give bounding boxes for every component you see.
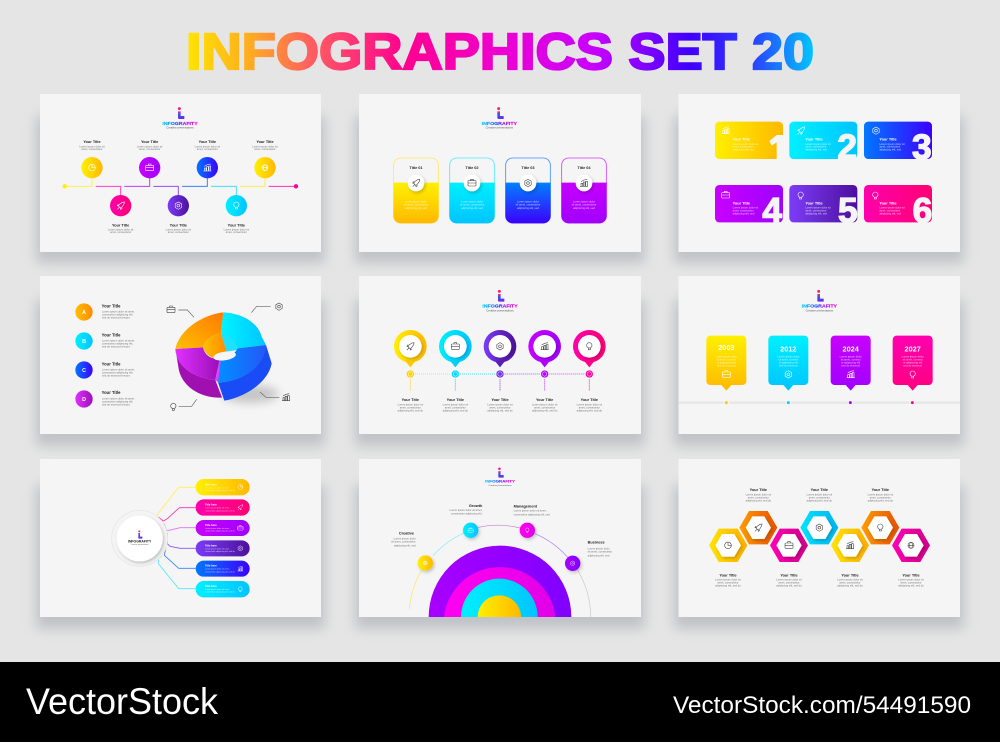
item B: Your Title <box>102 332 121 337</box>
logo: INFOGRAFITY <box>482 304 519 309</box>
pill 2: Title here <box>205 503 217 507</box>
card 5: adipiscing elit, sed <box>805 211 828 215</box>
hexagon 2: Lorem ipsum dolor sit <box>746 493 771 497</box>
pin 5: Your Title <box>581 398 598 402</box>
pill 1: consectetur adipiscing elit, sed do <box>205 489 236 492</box>
pill 5: Lorem ipsum dolor sit amet, <box>205 568 230 571</box>
central hub: INFOGRAFITY <box>128 540 152 544</box>
card 1: amet, consectetur <box>733 145 754 149</box>
card 3: Title 03 <box>521 166 535 170</box>
step 7: Lorem ipsum dolor sit <box>252 144 278 148</box>
hexagon 7: Lorem ipsum dolor sit <box>898 578 924 582</box>
item B: sed do eiusmod tempor. <box>102 345 131 349</box>
card 4: adipiscing elit, sed <box>733 211 755 215</box>
card 2: 2 <box>837 128 857 167</box>
card 2003: ut adipiscing elit <box>717 360 736 364</box>
logo: Creative presentations <box>806 309 834 312</box>
hexagon 2 <box>739 488 777 544</box>
card 3: Your Title <box>879 138 897 142</box>
card 1: Your Title <box>733 138 750 142</box>
hexagon 7: Your Title <box>902 574 920 578</box>
card 2: adipiscing elit, sed <box>461 206 483 210</box>
leader lines and icons <box>167 303 290 410</box>
item C: Your Title <box>102 361 121 366</box>
pill 3: consectetur adipiscing elit, sed do <box>205 530 236 533</box>
item D: Lorem ipsum dolor sit amet, <box>102 397 135 401</box>
card 4: amet, consectetur <box>733 208 754 212</box>
item B: consectetur adipiscing elit, <box>102 342 133 346</box>
step 2: Your Title <box>112 223 129 227</box>
card 1: Title 01 <box>409 166 423 170</box>
card 1 <box>393 158 439 223</box>
card 2024: sed do eiusmod <box>841 363 861 367</box>
hexagon 3 <box>770 529 808 588</box>
footer bar: VectorStock <box>26 681 218 722</box>
node: management <box>514 504 550 538</box>
connector lines <box>157 487 196 589</box>
card 5: amet, consectetur <box>805 208 827 212</box>
pill 2 <box>196 499 250 516</box>
hexagon 6 <box>861 488 899 544</box>
step 7 <box>252 140 278 178</box>
logo: INFOGRAFITY <box>482 121 518 126</box>
card 1: adipiscing elit, sed <box>405 206 427 210</box>
pin 3: amet, consectetur <box>489 405 511 409</box>
hexagon 7 <box>892 529 930 588</box>
card 1: Lorem ipsum dolor sit <box>733 142 758 146</box>
card 1: adipiscing elit, sed <box>733 148 755 152</box>
node: business <box>565 541 612 571</box>
card 2 <box>789 122 857 167</box>
card 5 <box>789 185 858 230</box>
node: creative: sit amet, consectetur <box>391 540 416 544</box>
pill 5: consectetur adipiscing elit, sed do <box>205 570 236 573</box>
step 2 <box>108 195 134 234</box>
hexagon 3: Lorem ipsum dolor sit <box>776 578 802 582</box>
card 2027 <box>893 336 933 405</box>
card 5: Your Title <box>805 201 823 205</box>
logo <box>482 107 518 129</box>
pill 6: consectetur adipiscing elit, sed do <box>205 591 236 594</box>
pin 3: Lorem ipsum dolor sit <box>487 402 513 406</box>
logo: Creative presentations <box>486 126 514 129</box>
pin 1 <box>394 330 427 412</box>
step 4: amet, consectetur <box>168 230 189 234</box>
node: creative <box>391 531 433 571</box>
pin 1: Your Title <box>402 398 419 402</box>
pin 1: adipiscing elit, sed do <box>398 408 424 412</box>
footer bar: VectorStock.com/54491590 <box>673 692 971 719</box>
step 5: Your Title <box>199 140 216 144</box>
hexagon 4: amet, consectetur <box>809 495 830 499</box>
step 3: Lorem ipsum dolor sit <box>137 144 163 148</box>
panel: hub and pills <box>40 459 321 617</box>
item B: B <box>82 339 86 345</box>
step 3: amet, consectetur <box>139 147 160 151</box>
hexagon 2: Your Title <box>750 488 767 492</box>
node: growth: Lorem ipsum dolor sit amet, <box>450 508 483 512</box>
hexagon 4: Lorem ipsum dolor sit <box>807 493 832 497</box>
donut chart <box>175 312 278 403</box>
node: management: consectetur adipiscing elit, sed <box>514 512 550 516</box>
hexagon 3: adipiscing elit, sed do <box>776 584 802 588</box>
node: growth <box>450 504 483 538</box>
card 4: sit amet, consectetur <box>572 203 596 207</box>
step 6: Your Title <box>228 223 245 227</box>
card 2027: sed do eiusmod <box>903 363 923 367</box>
card 2003: Lorem ipsum dolor <box>715 354 737 358</box>
item C: consectetur adipiscing elit, <box>102 371 133 375</box>
card 4: Lorem ipsum dolor <box>573 199 595 203</box>
pin 5: Lorem ipsum dolor sit <box>577 402 602 406</box>
step 5: Lorem ipsum dolor sit <box>195 144 220 148</box>
hexagon 1 <box>709 529 747 588</box>
card 2: amet, consectetur <box>805 145 827 149</box>
hexagon 5: adipiscing elit, sed do <box>837 584 863 588</box>
card 4: adipiscing elit, sed <box>573 206 595 210</box>
item D: Your Title <box>102 390 121 395</box>
footer bar <box>0 662 1000 742</box>
item A: Your Title <box>102 303 121 308</box>
panel: hexagon chain <box>678 459 960 617</box>
pin 2: amet, consectetur <box>445 405 466 409</box>
hexagon 5: amet, consectetur <box>839 581 861 585</box>
item D: consectetur adipiscing elit, <box>102 400 133 404</box>
item C: C <box>82 368 86 374</box>
pin 2: Lorem ipsum dolor sit <box>443 402 468 406</box>
hexagon 6: Lorem ipsum dolor sit <box>868 493 893 497</box>
step 5 <box>195 140 220 178</box>
card 2: sit amet, consectetur <box>460 203 484 207</box>
item C <box>75 361 135 379</box>
pill 4 <box>196 540 250 556</box>
card 2027: ut adipiscing elit <box>903 360 922 364</box>
pin 4: Lorem ipsum dolor sit <box>532 402 558 406</box>
hexagon 5 <box>831 529 869 588</box>
item A: A <box>82 310 86 316</box>
hexagon 4 <box>800 488 838 544</box>
item C: Lorem ipsum dolor sit amet, <box>102 368 135 372</box>
pill 6: Title here <box>205 584 217 588</box>
logo <box>802 290 838 312</box>
item A: Lorem ipsum dolor sit amet, <box>102 310 135 314</box>
card 2: Your Title <box>805 138 823 142</box>
step 1 <box>79 140 105 178</box>
card 1: Lorem ipsum dolor <box>405 199 427 203</box>
timeline bar <box>679 401 960 404</box>
card 2003: sed do eiusmod <box>717 363 736 367</box>
pill 2: Lorem ipsum dolor sit amet, <box>205 507 230 510</box>
card 6: adipiscing elit, sed <box>879 211 902 215</box>
pill 1: Lorem ipsum dolor sit amet, <box>205 486 230 489</box>
pill 5 <box>196 561 250 577</box>
card 6: 6 <box>913 191 932 230</box>
step 4: Lorem ipsum dolor sit <box>166 227 191 231</box>
pill 1 <box>196 479 250 495</box>
hexagon 2: adipiscing elit, sed do <box>746 498 772 502</box>
logo: Creative presentations <box>166 126 195 129</box>
card 3: amet, consectetur <box>879 145 901 149</box>
step 3 <box>137 140 163 178</box>
logo: INFOGRAFITY <box>162 121 199 126</box>
card 1: sit amet, consectetur <box>404 203 428 207</box>
node: creative: adipiscing elit, sed <box>394 543 416 547</box>
step 5: amet, consectetur <box>197 147 218 151</box>
step 7: amet, consectetur <box>254 147 276 151</box>
pin 2 <box>439 330 472 412</box>
pin 4: amet, consectetur <box>534 405 555 409</box>
node: creative: Lorem ipsum dolor <box>394 537 416 541</box>
card 2024: 2024 <box>843 345 860 354</box>
card 2024 <box>831 336 871 405</box>
item D <box>75 390 135 408</box>
hexagon 1: adipiscing elit, sed do <box>715 584 741 588</box>
pin 3 <box>484 330 516 412</box>
pin 5: amet, consectetur <box>579 405 600 409</box>
card 6: Lorem ipsum dolor sit <box>879 206 905 210</box>
card 3: sit amet, consectetur <box>516 203 540 207</box>
card 2: Lorem ipsum dolor sit <box>805 142 831 146</box>
node: growth: Growth <box>469 504 483 508</box>
logo: Creative presentations <box>488 484 512 487</box>
hexagon 1: amet, consectetur <box>717 581 739 585</box>
logo <box>162 107 199 129</box>
card 3: Lorem ipsum dolor <box>517 199 539 203</box>
card 4 <box>715 185 783 230</box>
step 2: Lorem ipsum dolor sit <box>108 227 134 231</box>
hexagon 6: adipiscing elit, sed do <box>868 498 894 502</box>
card 2024: Lorem ipsum dolor <box>840 354 862 358</box>
card 2003 <box>706 336 746 405</box>
pin 3: Your Title <box>491 398 509 402</box>
step 1: Lorem ipsum dolor sit <box>79 144 105 148</box>
step 1: Your Title <box>83 140 101 144</box>
card 4 <box>561 158 607 223</box>
card 1 <box>715 122 783 159</box>
pill 4: Lorem ipsum dolor sit amet, <box>205 547 230 550</box>
pin 4: adipiscing elit, sed do <box>532 408 558 412</box>
step 1: amet, consectetur <box>81 147 103 151</box>
node: creative: Creative <box>399 531 414 535</box>
card 5: Lorem ipsum dolor sit <box>805 206 831 210</box>
card 2027: 2027 <box>905 345 921 354</box>
node: business: Lorem ipsum dolor <box>588 547 610 551</box>
card 2: adipiscing elit, sed <box>805 148 828 152</box>
pin 4: Your Title <box>536 398 553 402</box>
hexagon 7: amet, consectetur <box>900 581 922 585</box>
panel: 3D donut chart <box>40 276 321 434</box>
card 4: 4 <box>762 191 782 230</box>
item C: sed do eiusmod tempor. <box>102 374 131 378</box>
card 2: Lorem ipsum dolor <box>461 199 483 203</box>
card 4: Your Title <box>733 201 750 205</box>
pin 5 <box>573 330 606 412</box>
logo <box>485 468 515 487</box>
step 6 <box>224 195 249 234</box>
panel: pin timeline <box>359 276 641 434</box>
pin 5: adipiscing elit, sed do <box>577 408 603 412</box>
logo: Creative presentations <box>486 309 515 312</box>
card 2012: Lorem ipsum dolor <box>777 354 799 358</box>
pill 6 <box>196 581 250 597</box>
step 3: Your Title <box>141 140 158 144</box>
card 6: Your Title <box>879 201 897 205</box>
pin 3: adipiscing elit, sed do <box>487 408 513 412</box>
pin 2: Your Title <box>447 398 464 402</box>
card 4: Lorem ipsum dolor sit <box>733 206 758 210</box>
hexagon 6: amet, consectetur <box>870 495 891 499</box>
pill 6: Lorem ipsum dolor sit amet, <box>205 588 230 591</box>
card 2012: sed do eiusmod <box>779 363 798 367</box>
pin 1: amet, consectetur <box>400 405 421 409</box>
card 2012 <box>768 336 808 405</box>
card 2012: 2012 <box>780 345 796 354</box>
panel: year timeline <box>678 276 960 434</box>
step 2: amet, consectetur <box>110 230 131 234</box>
title: INFOGRAPHICS SET 20 <box>186 23 814 80</box>
pill 3: Title here <box>205 523 217 527</box>
pin 1: Lorem ipsum dolor sit <box>398 402 423 406</box>
pill 1: Title here <box>205 482 217 486</box>
concentric semicircles <box>429 546 571 617</box>
card 5: 5 <box>838 191 858 230</box>
orbit arc <box>409 525 591 617</box>
logo: INFOGRAFITY <box>802 304 838 309</box>
node: business: Business <box>588 541 605 545</box>
card 6 <box>864 185 932 230</box>
step 7: Your Title <box>256 140 274 144</box>
node: management: Management <box>514 504 538 508</box>
hexagon 5: Your Title <box>841 574 859 578</box>
hexagon 7: adipiscing elit, sed do <box>898 584 924 588</box>
logo <box>482 290 519 312</box>
node: growth: consectetur adipiscing elit. <box>451 511 483 515</box>
card 2024: ut adipiscing elit <box>841 360 860 364</box>
hexagon 3: Your Title <box>780 574 798 578</box>
pin 2: adipiscing elit, sed do <box>443 408 469 412</box>
card 4: Title 04 <box>577 166 591 170</box>
item A: consectetur adipiscing elit, <box>102 313 133 317</box>
card 3: Lorem ipsum dolor sit <box>879 142 905 146</box>
logo: INFOGRAFITY <box>485 479 515 484</box>
node: management: Lorem ipsum dolor sit amet, <box>514 509 547 513</box>
step 6: Lorem ipsum dolor sit <box>224 227 249 231</box>
item B: Lorem ipsum dolor sit amet, <box>102 339 135 343</box>
card 3: adipiscing elit, sed <box>517 206 539 210</box>
card 3: adipiscing elit, sed <box>879 148 902 152</box>
hexagon 3: amet, consectetur <box>778 581 800 585</box>
panel: four title cards <box>359 94 641 252</box>
step 4 <box>166 195 191 234</box>
central hub <box>112 510 168 566</box>
card 2 <box>449 158 495 223</box>
panel: six numbered cards <box>678 94 960 252</box>
pill 4: consectetur adipiscing elit, sed do <box>205 550 236 553</box>
panel: zigzag timeline <box>40 94 321 252</box>
card 2012: sit amet, consect <box>778 357 799 361</box>
item D: D <box>82 397 86 403</box>
hexagon 1: Your Title <box>719 574 737 578</box>
node: business: adipiscing elit, sed <box>588 553 610 557</box>
card 6: amet, consectetur <box>879 208 901 212</box>
item A: sed do eiusmod tempor. <box>102 316 131 320</box>
pill 3: Lorem ipsum dolor sit amet, <box>205 527 230 530</box>
panel: concentric arcs <box>359 459 641 617</box>
step 6: amet, consectetur <box>226 230 247 234</box>
card 3: 3 <box>912 128 932 167</box>
item A <box>75 303 135 321</box>
card 2024: sit amet, consect <box>841 357 861 361</box>
central hub: Creative presentations <box>131 543 149 546</box>
card 2012: ut adipiscing elit <box>779 360 798 364</box>
pin 4 <box>528 330 561 412</box>
node: business: sit amet, consectetur <box>588 550 612 554</box>
item B <box>75 332 135 350</box>
hexagon 4: Your Title <box>811 488 828 492</box>
pill 5: Title here <box>205 564 217 568</box>
card 2003: sit amet, consect <box>716 357 737 361</box>
card 2: Title 02 <box>465 166 479 170</box>
pill 3 <box>196 520 250 536</box>
dotted connector <box>415 372 585 375</box>
hexagon 6: Your Title <box>872 488 889 492</box>
hexagon 2: amet, consectetur <box>748 495 769 499</box>
item D: sed do eiusmod tempor. <box>102 403 131 407</box>
pill 4: Title here <box>205 543 217 547</box>
card 3 <box>505 158 551 223</box>
hexagon 1: Lorem ipsum dolor sit <box>715 578 741 582</box>
pill 2: consectetur adipiscing elit, sed do <box>205 509 236 512</box>
card 2003: 2003 <box>718 343 734 352</box>
connector line <box>62 178 298 195</box>
card 2027: Lorem ipsum dolor <box>902 354 924 358</box>
hexagon 4: adipiscing elit, sed do <box>807 498 833 502</box>
step 4: Your Title <box>170 223 187 227</box>
card 2027: sit amet, consect <box>903 357 923 361</box>
card 3 <box>864 122 932 167</box>
hexagon 5: Lorem ipsum dolor sit <box>837 578 863 582</box>
